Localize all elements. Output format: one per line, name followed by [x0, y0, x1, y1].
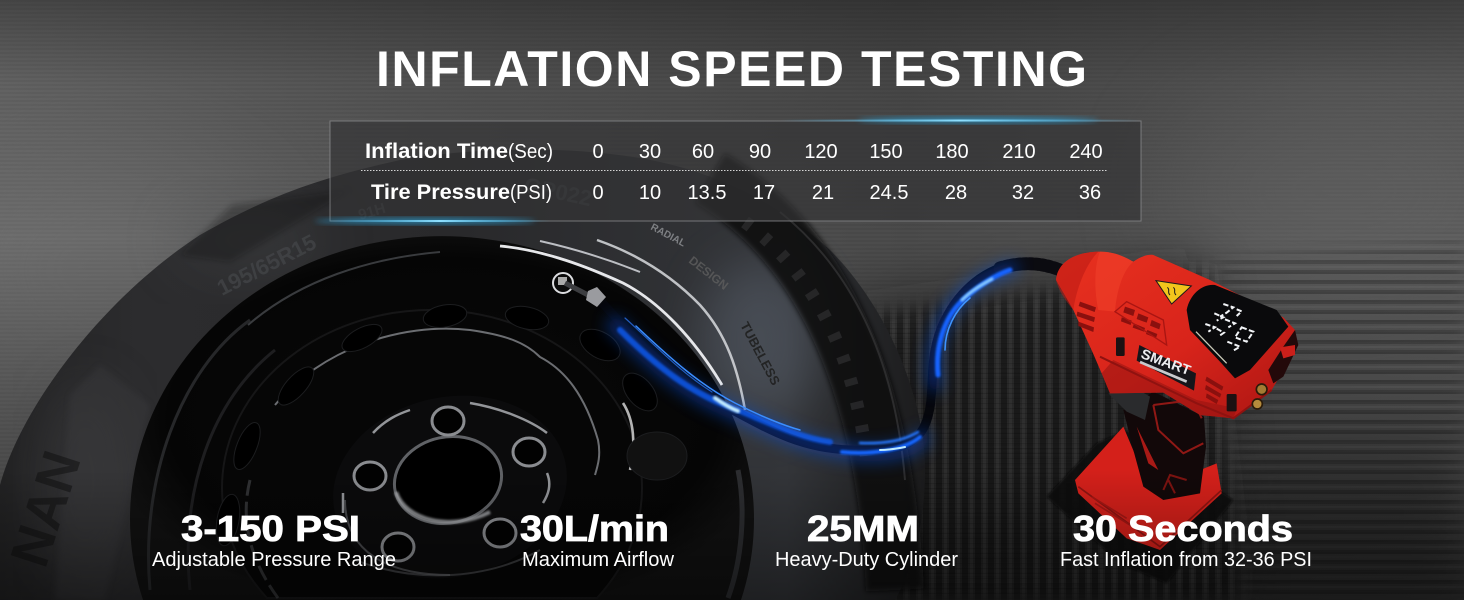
battery pack	[1075, 427, 1222, 550]
data table panel	[315, 117, 1141, 224]
tread band	[710, 178, 895, 590]
top edge glow	[858, 117, 1098, 123]
ventilation holes	[213, 301, 687, 548]
row: inflation time	[365, 140, 1103, 163]
air hose	[597, 262, 1060, 453]
pump body	[1056, 252, 1297, 418]
row: tire pressure: 17	[753, 182, 775, 204]
spec: pressure range: 3-150 PSI	[181, 508, 360, 549]
row: tire pressure: 24.5	[870, 182, 908, 204]
spec: cylinder: 25MM	[807, 508, 919, 549]
title: INFLATION SPEED TESTING	[376, 41, 1087, 97]
row: tire pressure: Tire Pressure	[371, 181, 510, 204]
row: inflation time: 240	[1069, 141, 1103, 163]
spec: pressure range: Adjustable Pressure Range	[152, 549, 396, 571]
brass fittings	[1252, 330, 1298, 409]
steel rim	[130, 236, 754, 600]
row: tire pressure: 21	[812, 182, 834, 204]
row: tire pressure: 36	[1079, 182, 1101, 204]
spec: cylinder	[775, 508, 958, 571]
wheel disc	[222, 310, 642, 598]
tire outer body	[0, 150, 925, 600]
row: inflation time: 150	[869, 141, 903, 163]
row: tire pressure	[371, 181, 1101, 204]
tire: 91H	[356, 200, 388, 224]
spec: airflow	[520, 508, 675, 571]
row: inflation time: 210	[1002, 141, 1036, 163]
lug holes	[354, 407, 545, 561]
tire	[0, 150, 925, 600]
center bore	[386, 427, 510, 533]
SMART badge: SMART	[1139, 345, 1193, 378]
tire: NAN	[0, 444, 93, 574]
tire: GP022	[522, 172, 594, 211]
row: inflation time: 120	[804, 141, 838, 163]
row: tire pressure: (PSI)	[510, 182, 552, 204]
row divider	[361, 170, 1108, 172]
tire pump	[1047, 252, 1298, 583]
row: tire pressure: 0	[592, 182, 604, 204]
digital display	[1187, 285, 1288, 378]
vents	[1077, 302, 1223, 404]
spec: inflation time: 30 Seconds	[1073, 508, 1293, 549]
spec: airflow: 30L/min	[520, 508, 669, 549]
row: inflation time: Inflation Time	[365, 140, 508, 163]
row: inflation time: 180	[935, 141, 969, 163]
rim highlights	[597, 240, 745, 410]
spec: airflow: Maximum Airflow	[522, 549, 675, 571]
row: inflation time: 60	[692, 141, 714, 163]
tire: TUBELESS	[737, 319, 783, 388]
row: inflation time: 30	[639, 141, 661, 163]
row: tire pressure: 10	[639, 182, 661, 204]
SMART badge	[1137, 345, 1196, 391]
bottom shading	[0, 470, 1464, 600]
tire: DESIGN	[686, 253, 731, 293]
handle	[1108, 387, 1206, 500]
row: inflation time: (Sec)	[508, 141, 553, 163]
spec: pressure range	[152, 508, 396, 571]
hub	[316, 374, 584, 600]
row: tire pressure: 28	[945, 182, 967, 204]
spec: inflation time	[1060, 508, 1312, 571]
row: inflation time: 90	[749, 141, 771, 163]
spec: inflation time: Fast Inflation from 32-36 PSI	[1060, 549, 1312, 571]
sidewall lettering: 195/65R15	[213, 229, 320, 300]
pump base shadow	[1047, 430, 1233, 583]
spec: cylinder: Heavy-Duty Cylinder	[775, 549, 958, 571]
row: inflation time: 0	[592, 141, 604, 163]
valve connector	[553, 273, 606, 307]
warning triangle	[1156, 281, 1191, 304]
row: tire pressure: 13.5	[688, 182, 726, 204]
hose blue glow	[615, 325, 922, 453]
row: tire pressure: 32	[1012, 182, 1034, 204]
tire: RADIAL	[649, 222, 687, 249]
